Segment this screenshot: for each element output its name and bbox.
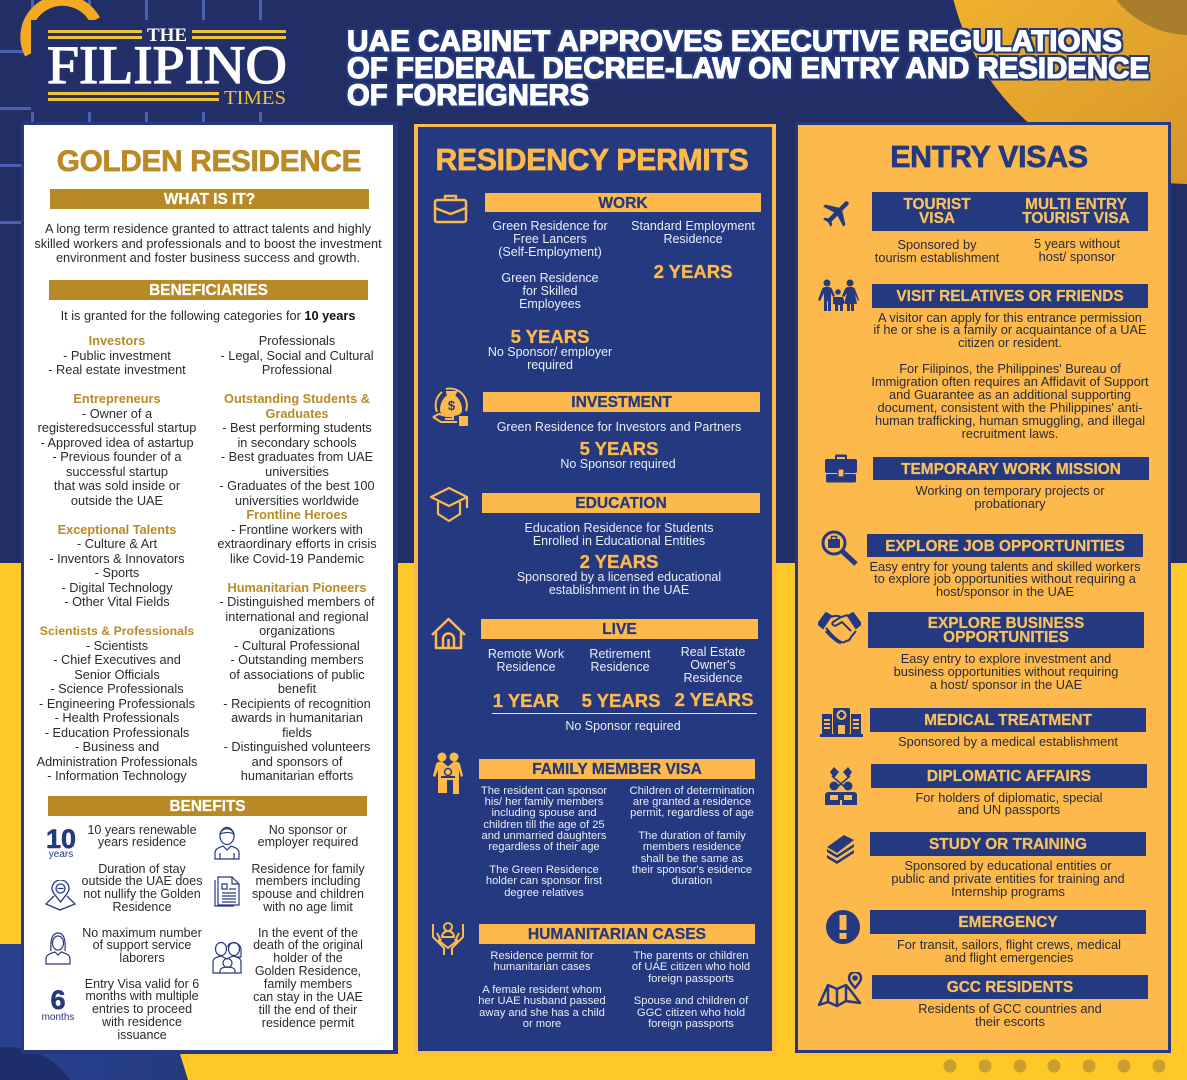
list: beneficiaries right column: Humanitarian Pioneers (228, 580, 366, 594)
text: investment detail: Green Residence for Investors and Partners (497, 420, 741, 434)
list: beneficiaries left column: - Sports (95, 565, 139, 580)
label: multi entry tourist visa: TOURIST VISA (1022, 210, 1130, 227)
text: real estate owner: Real Estate (681, 644, 745, 658)
text: humanitarian right: foreign passports (648, 973, 734, 985)
text: real estate owner: Owner's (690, 658, 736, 672)
text: education detail: Education Residence for Students (524, 520, 714, 534)
section bar: humanitarian cases (479, 924, 755, 944)
list: beneficiaries right column: Professionals (259, 333, 335, 348)
text: benefit death of holder: can stay in the UAE (253, 990, 363, 1004)
list: beneficiaries left column: - Inventors & Innovators (49, 550, 185, 566)
icon: 6 months (42, 985, 74, 1023)
text: five years without host: host/ sponsor (1039, 248, 1115, 264)
text: definition: environment and foster business success and growth. (56, 250, 360, 265)
section bar: live (481, 619, 758, 639)
section bar: visit relatives: VISIT RELATIVES OR FRIENDS (896, 288, 1124, 305)
text: sponsored by tourism (875, 238, 999, 264)
text: visit relatives: citizen or resident. (958, 335, 1062, 350)
icon: document (214, 876, 240, 907)
text: benefit support laborers: No maximum number (82, 926, 202, 940)
text: humanitarian left: her UAE husband passed (478, 995, 606, 1007)
text: family right: Children of determination (630, 784, 754, 796)
text: benefit entry visa: entries to proceed (92, 1002, 192, 1016)
section bar: benefits (48, 796, 367, 816)
icon: emergency (826, 910, 860, 944)
text: family left: regardless of their age (488, 841, 600, 853)
text: benefit duration of stay (82, 862, 202, 914)
text: benefit family members: spouse and children (252, 887, 364, 901)
list: beneficiaries left column: - Science Professionals (50, 681, 184, 696)
list: beneficiaries right column: humanitarian efforts (241, 768, 353, 783)
figure: 5 years live: 5 YEARS (582, 690, 660, 711)
text: diplomatic (915, 792, 1103, 817)
list: beneficiaries left column: - Education Professionals (45, 724, 189, 740)
section bar: investment: INVESTMENT (571, 394, 672, 411)
list: beneficiaries left column: - Owner of a (82, 406, 152, 420)
text: definition: skilled workers and professionals and to boost the investment (34, 236, 382, 250)
text: study (891, 858, 1125, 898)
text: visit relatives: and Guarantee as an additional supporting (889, 387, 1131, 402)
panel: golden residence (21, 122, 398, 1054)
icon: plane (823, 201, 849, 227)
text: family left: and unmarried daughters (481, 830, 606, 842)
text: education sponsor: Sponsored by a licensed educational (517, 570, 721, 584)
list: beneficiaries left column: that was sold inside or (54, 478, 180, 493)
list: beneficiaries left column: - Real estate investment (48, 362, 186, 377)
list: beneficiaries left column: - Digital Technology (61, 580, 173, 594)
list: beneficiaries right column: and sponsors of (252, 754, 342, 768)
text: work right: Residence (663, 232, 723, 246)
section bar: emergency: EMERGENCY (958, 914, 1058, 931)
icon: briefcase dark (825, 454, 857, 483)
list: beneficiaries right column: Frontline Heroes (246, 507, 348, 522)
text: benefit death of holder (253, 926, 363, 1030)
text: real estate owner (681, 644, 745, 684)
list: beneficiaries left column: registeredsuccessful startup (38, 420, 196, 435)
text: humanitarian left: or more (523, 1018, 561, 1030)
text: family left: including spouse and (491, 807, 597, 819)
list: beneficiaries right column (217, 333, 377, 783)
text: explore business: business opportunities without requiring (894, 664, 1118, 678)
text: benefit family members: with no age limit (263, 900, 353, 914)
text: sponsored by tourism: Sponsored by (898, 236, 976, 252)
figure: 2 years: 2 YEARS (654, 261, 732, 282)
text: medical: Sponsored by a medical establishment (898, 734, 1118, 748)
list: beneficiaries left column: - Scientists (86, 638, 148, 652)
text: visit relatives: For Filipinos, the Philippines' Bureau of (899, 361, 1121, 376)
text: family left: children till the age of 25 (483, 819, 605, 831)
text: gcc (918, 1002, 1102, 1028)
icon: house (431, 618, 466, 650)
text: work left: (Self-Employment) (498, 244, 602, 258)
text: benefit support laborers (82, 926, 202, 965)
text: benefit duration of stay: Residence (112, 900, 172, 914)
text: gcc: their escorts (975, 1014, 1045, 1028)
text: benefit no sponsor: No sponsor or (269, 822, 347, 836)
list: beneficiaries left column: - Engineering Professionals (39, 696, 195, 710)
text: no sponsor live: No Sponsor required (565, 718, 681, 732)
icon: magnifier (821, 530, 858, 567)
text: visit relatives (871, 312, 1149, 441)
panel: residency permits (414, 124, 776, 1054)
text: benefit death of holder: death of the original (253, 938, 363, 952)
text: work left: Free Lancers (513, 232, 587, 246)
logo: The Filipino Times (31, 20, 287, 112)
list: beneficiaries right column: organizations (259, 623, 335, 638)
text: family left: The resident can sponsor (481, 784, 607, 796)
text: benefit entry visa: Entry Visa valid for 6 (85, 976, 199, 990)
icon: man (214, 826, 240, 860)
text: visit relatives: if he or she is a family or acquaintance of a UAE (873, 322, 1147, 337)
icon: map pin (45, 880, 76, 911)
section bar: study or training (870, 832, 1146, 856)
list: beneficiaries left column: successful startup (66, 464, 168, 478)
text: benefit no sponsor: employer required (258, 835, 358, 849)
text: benefit death of holder: holder of the (273, 951, 343, 965)
text: retirement: Retirement (589, 646, 651, 660)
text: five years without host: 5 years without (1034, 236, 1120, 250)
icon: briefcase (434, 194, 468, 224)
section bar: education: EDUCATION (575, 495, 667, 512)
icon: 6 months: months (42, 1012, 74, 1023)
text: definition: A long term residence granted to attract talents and highly (45, 221, 371, 236)
section bar: live: LIVE (602, 621, 637, 638)
text: humanitarian left: away and she has a child (479, 1007, 605, 1019)
text: temporary work (916, 484, 1104, 510)
text: education sponsor: establishment in the UAE (549, 582, 689, 596)
text: humanitarian left: A female resident whom (482, 984, 602, 996)
title: OF FOREIGNERS (347, 79, 589, 112)
section bar: beneficiaries: BENEFICIARIES (149, 282, 268, 299)
list: beneficiaries left column: Administration Professionals (37, 754, 197, 768)
text: humanitarian right: The parents or children (633, 950, 749, 962)
text: work left: Employees (519, 296, 581, 310)
list: beneficiaries right column: - Outstanding members (230, 652, 364, 667)
icon: hospital (820, 707, 863, 737)
text: explore business: Easy entry to explore investment and (901, 650, 1111, 666)
text: visit relatives: human trafficking, human smuggling, and illegal (875, 413, 1145, 428)
list: beneficiaries right column: Graduates (265, 406, 329, 420)
figure: 2 years live: 2 YEARS (675, 689, 753, 710)
section bar: medical treatment: MEDICAL TREATMENT (924, 712, 1092, 729)
list: beneficiaries left column: Scientists & Professionals (40, 624, 194, 638)
text: family right: permit, regardless of age (630, 807, 754, 819)
text: no sponsor or employer: No Sponsor/ employer (488, 344, 612, 358)
section bar: humanitarian cases: HUMANITARIAN CASES (528, 926, 706, 943)
text: work right (631, 218, 755, 246)
text: family right: duration (672, 875, 712, 887)
section bar: temporary work mission (873, 457, 1149, 480)
section bar: explore business: EXPLORE BUSINESS (928, 615, 1084, 632)
icon: handshake (818, 612, 861, 646)
text: benefit death of holder: Golden Residence, (255, 964, 361, 978)
text: study: public and private entities for training and (891, 870, 1125, 886)
text: remote work (488, 646, 564, 674)
text: benefit no sponsor (258, 822, 358, 849)
list: beneficiaries right column: benefit (278, 681, 316, 696)
text: family right: their sponsor's esidence (632, 864, 752, 876)
section bar: explore business (868, 612, 1144, 648)
text: family left: degree relatives (504, 887, 584, 899)
text: explore business (894, 652, 1118, 690)
list: beneficiaries left column: - Public investment (63, 348, 171, 362)
text: visit relatives: A visitor can apply for this entrance permission (878, 310, 1142, 324)
text: benefit family members (251, 862, 365, 914)
list: beneficiaries left column: - Previous founder of a (52, 449, 182, 464)
label: tourist visa (903, 196, 971, 227)
text: retirement: Residence (590, 660, 650, 674)
figure: 5 years: 5 YEARS (511, 326, 589, 347)
text: no sponsor or employer (488, 344, 612, 372)
section bar: gcc residents: GCC RESIDENTS (947, 979, 1073, 996)
text: five years without host (1034, 236, 1120, 262)
list: beneficiaries left column: - Business and (75, 739, 159, 754)
text: explore job: Easy entry for young talents and skilled workers (870, 558, 1140, 574)
icon: investment money bag (432, 388, 468, 426)
list: beneficiaries left column: Investors (89, 333, 145, 348)
section bar: diplomatic affairs: DIPLOMATIC AFFAIRS (927, 768, 1091, 785)
figure: 2 years education: 2 YEARS (580, 551, 658, 572)
text: benefit duration of stay: Duration of stay (98, 862, 186, 876)
section bar: study or training: STUDY OR TRAINING (929, 836, 1087, 853)
icon: 6 months: 6 (50, 985, 66, 1015)
text: work left (492, 218, 608, 310)
text: benefit support laborers: laborers (119, 951, 165, 965)
text: education detail: Enrolled in Educational Entities (533, 534, 705, 548)
text: family left (481, 784, 607, 899)
text: work left: Green Residence (501, 270, 599, 284)
text: family right (630, 784, 754, 887)
text: work right: Standard Employment (631, 218, 755, 232)
label: tourist visa: TOURIST (903, 196, 971, 212)
list: beneficiaries right column: - Graduates of the best 100 (219, 478, 375, 493)
section bar: work: WORK (598, 194, 648, 212)
icon: 10 years: years (49, 848, 73, 860)
text: real estate owner: Residence (683, 670, 743, 684)
text: family left: his/ her family members (485, 796, 603, 808)
text: education detail (524, 520, 714, 548)
icon: caring hands (432, 922, 464, 955)
list: beneficiaries right column: - Legal, Social and Cultural (220, 348, 374, 362)
list: beneficiaries right column: Professional (262, 362, 332, 377)
list: beneficiaries right column: - Distinguished members of (219, 594, 375, 609)
icon: woman (45, 932, 71, 965)
text: work left: for Skilled (523, 284, 577, 298)
list: beneficiaries left column: Senior Officials (74, 666, 160, 682)
list: beneficiaries right column: universities (265, 464, 329, 478)
section bar: explore job opportunities: EXPLORE JOB OPPORTUNITIES (885, 538, 1125, 554)
text: remote work: Remote Work (488, 646, 564, 660)
text: benefit support laborers: of support service (93, 938, 191, 952)
icon: family (212, 942, 242, 974)
section bar: what is it: WHAT IS IT? (164, 191, 255, 208)
label: multi entry tourist visa (1022, 198, 1130, 226)
figure: 1 year: 1 YEAR (493, 690, 559, 711)
text: visit relatives: recruitment laws. (962, 426, 1058, 441)
section bar: investment (483, 392, 760, 412)
list: beneficiaries right column: like Covid-19 Pandemic (230, 550, 364, 566)
text: work left: Green Residence for (492, 218, 608, 232)
label: multi entry tourist visa: MULTI ENTRY (1025, 196, 1127, 212)
text: definition (34, 221, 382, 265)
list: beneficiaries left column (36, 333, 197, 783)
list: beneficiaries right column: extraordinary efforts in crisis (217, 536, 377, 551)
text: humanitarian left: Residence permit for (490, 950, 594, 962)
icon: family dark (818, 279, 859, 311)
logo: The Filipino Times: TIMES (224, 87, 286, 109)
list: beneficiaries right column: - Best performing students (222, 420, 372, 435)
text: retirement (589, 646, 651, 674)
list: beneficiaries right column: Outstanding Students & (224, 391, 370, 406)
text: family right: The duration of family (638, 830, 746, 842)
text: explore job: host/sponsor in the UAE (936, 584, 1074, 599)
text: family left: holder can sponsor first (486, 875, 602, 887)
section bar: emergency (870, 910, 1146, 934)
text: sponsored by tourism: tourism establishment (875, 250, 999, 264)
list: beneficiaries right column: - Frontline workers with (231, 522, 363, 536)
text: humanitarian right (632, 950, 750, 1030)
heading: golden residence: GOLDEN RESIDENCE (57, 145, 361, 178)
text: humanitarian left (478, 950, 606, 1030)
list: beneficiaries left column: - Other Vital Fields (64, 594, 170, 609)
list: beneficiaries right column: international and regional (225, 608, 369, 624)
list: beneficiaries left column: - Health Professionals (55, 710, 179, 725)
icon: books (826, 834, 855, 865)
text: study: Internship programs (951, 884, 1065, 898)
text: emergency: For transit, sailors, flight crews, medical (897, 936, 1121, 952)
text: beneficiaries intro: It is granted for the following categories for 10 years (61, 308, 355, 323)
text: humanitarian right: GGC citizen who hold (637, 1007, 745, 1019)
text: benefit entry visa: months with multiple (85, 989, 199, 1003)
text: family right: members residence (643, 841, 741, 853)
figure: 5 years investment: 5 YEARS (580, 438, 658, 459)
text: benefit family members: members including (256, 874, 360, 888)
section bar: benefits: BENEFITS (169, 798, 246, 815)
text: gcc: Residents of GCC countries and (918, 1000, 1102, 1016)
text: diplomatic: and UN passports (958, 802, 1060, 817)
list: beneficiaries left column: - Information Technology (47, 768, 187, 783)
text: study: Sponsored by educational entities or (904, 858, 1112, 872)
section bar: gcc residents (872, 975, 1148, 999)
title (346, 25, 1150, 112)
text: emergency: and flight emergencies (945, 950, 1073, 964)
text: diplomatic: For holders of diplomatic, special (915, 790, 1103, 804)
text: education sponsor (517, 570, 721, 596)
list: beneficiaries right column: fields (282, 724, 312, 740)
label: tourist visa: VISA (919, 210, 955, 227)
icon: 10 years: 10 (46, 824, 76, 854)
text: benefit death of holder: residence permit (262, 1016, 354, 1030)
text: benefit 10 years: years residence (98, 835, 186, 849)
icon: investment money bag: $ (448, 398, 456, 413)
section bar: diplomatic affairs (871, 764, 1147, 788)
list: beneficiaries left column: - Approved idea of astartup (40, 434, 194, 450)
text: benefit death of holder: till the end of their (259, 1003, 357, 1017)
heading: entry visas: ENTRY VISAS (890, 141, 1088, 174)
text: visit relatives: document, consistent with the Philippines' anti- (878, 400, 1142, 415)
text: benefit entry visa: issuance (117, 1028, 167, 1042)
text: emergency (897, 938, 1121, 964)
list: beneficiaries right column: - Distinguished volunteers (224, 739, 370, 754)
text: visit relatives: Immigration often requires an Affidavit of Support (871, 374, 1149, 389)
list: beneficiaries right column: awards in humanitarian (231, 710, 363, 725)
logo: The Filipino Times: THE (147, 25, 187, 46)
text: humanitarian left: humanitarian cases (493, 961, 590, 973)
list: beneficiaries left column: - Chief Executives and (53, 652, 181, 667)
list: beneficiaries right column: - Cultural Professional (234, 638, 360, 652)
text: benefit duration of stay: outside the UAE does (82, 874, 202, 888)
section bar: beneficiaries (49, 280, 368, 300)
text: humanitarian right: Spouse and children of (634, 995, 748, 1007)
text: temporary work: probationary (974, 496, 1046, 510)
decorative dots row (940, 1056, 1170, 1076)
section bar: visit relatives (872, 284, 1148, 308)
text: benefit death of holder: family members (264, 977, 352, 991)
list: beneficiaries right column: of associations of public (229, 666, 365, 682)
icon: family gold (433, 752, 463, 794)
title: UAE CABINET APPROVES EXECUTIVE REGULATIONS (347, 25, 1122, 58)
section bar: family member visa: FAMILY MEMBER VISA (532, 761, 702, 778)
text: benefit family members: Residence for family (251, 862, 365, 876)
list: beneficiaries right column: in secondary schools (237, 434, 357, 450)
list: beneficiaries left column: - Culture & Art (77, 536, 157, 551)
section bar: temporary work mission: TEMPORARY WORK MISSION (901, 460, 1121, 478)
panel: entry visas (795, 122, 1171, 1053)
text: explore business: a host/ sponsor in the UAE (930, 676, 1082, 692)
icon: map (818, 972, 863, 1008)
text: humanitarian right: foreign passports (648, 1018, 734, 1030)
list: beneficiaries right column: universities worldwide (235, 492, 359, 508)
text: humanitarian right: of UAE citizen who hold (632, 961, 750, 973)
text: no sponsor or employer: required (527, 358, 573, 372)
section bar: work (485, 193, 761, 212)
text: benefit duration of stay: not nullify the Golden (83, 887, 201, 901)
section bar: tourist visas (872, 192, 1148, 231)
text: benefit 10 years: 10 years renewable (87, 822, 197, 836)
text: family right: are granted a residence (633, 796, 751, 808)
logo: The Filipino Times: FILIPINO (47, 35, 287, 95)
section bar: medical treatment (870, 708, 1146, 732)
title: OF FEDERAL DECREE-LAW ON ENTRY AND RESIDENCE (347, 52, 1149, 85)
text: benefit entry visa (85, 976, 199, 1042)
list: beneficiaries right column: - Best graduates from UAE (221, 449, 373, 464)
list: beneficiaries left column: Entrepreneurs (73, 391, 161, 406)
section bar: education (482, 493, 760, 513)
text: no sponsor: No Sponsor required (560, 456, 676, 470)
icon: graduation cap (430, 486, 468, 522)
text: benefit 10 years (87, 822, 197, 849)
section bar: what is it (50, 189, 369, 209)
heading: residency permits: RESIDENCY PERMITS (436, 144, 748, 176)
text: explore job (870, 560, 1140, 599)
text: benefit entry visa: with residence (102, 1015, 182, 1029)
list: beneficiaries left column: Exceptional Talents (58, 522, 176, 536)
text: benefit death of holder: In the event of the (258, 926, 358, 940)
text: family right: shall be the same as (641, 853, 743, 865)
text: temporary work: Working on temporary projects or (916, 482, 1104, 498)
section bar: explore business: OPPORTUNITIES (943, 629, 1069, 646)
list: beneficiaries left column: outside the UAE (71, 492, 163, 508)
text: family left: The Green Residence (489, 864, 599, 876)
section bar: explore job opportunities (867, 534, 1143, 557)
text: explore job: to explore job opportunities without requiring a (874, 571, 1136, 586)
section bar: family member visa (479, 759, 755, 779)
list: beneficiaries right column: - Recipients of recognition (223, 696, 371, 710)
icon: diplomats (824, 766, 858, 806)
text: remote work: Residence (496, 660, 556, 674)
